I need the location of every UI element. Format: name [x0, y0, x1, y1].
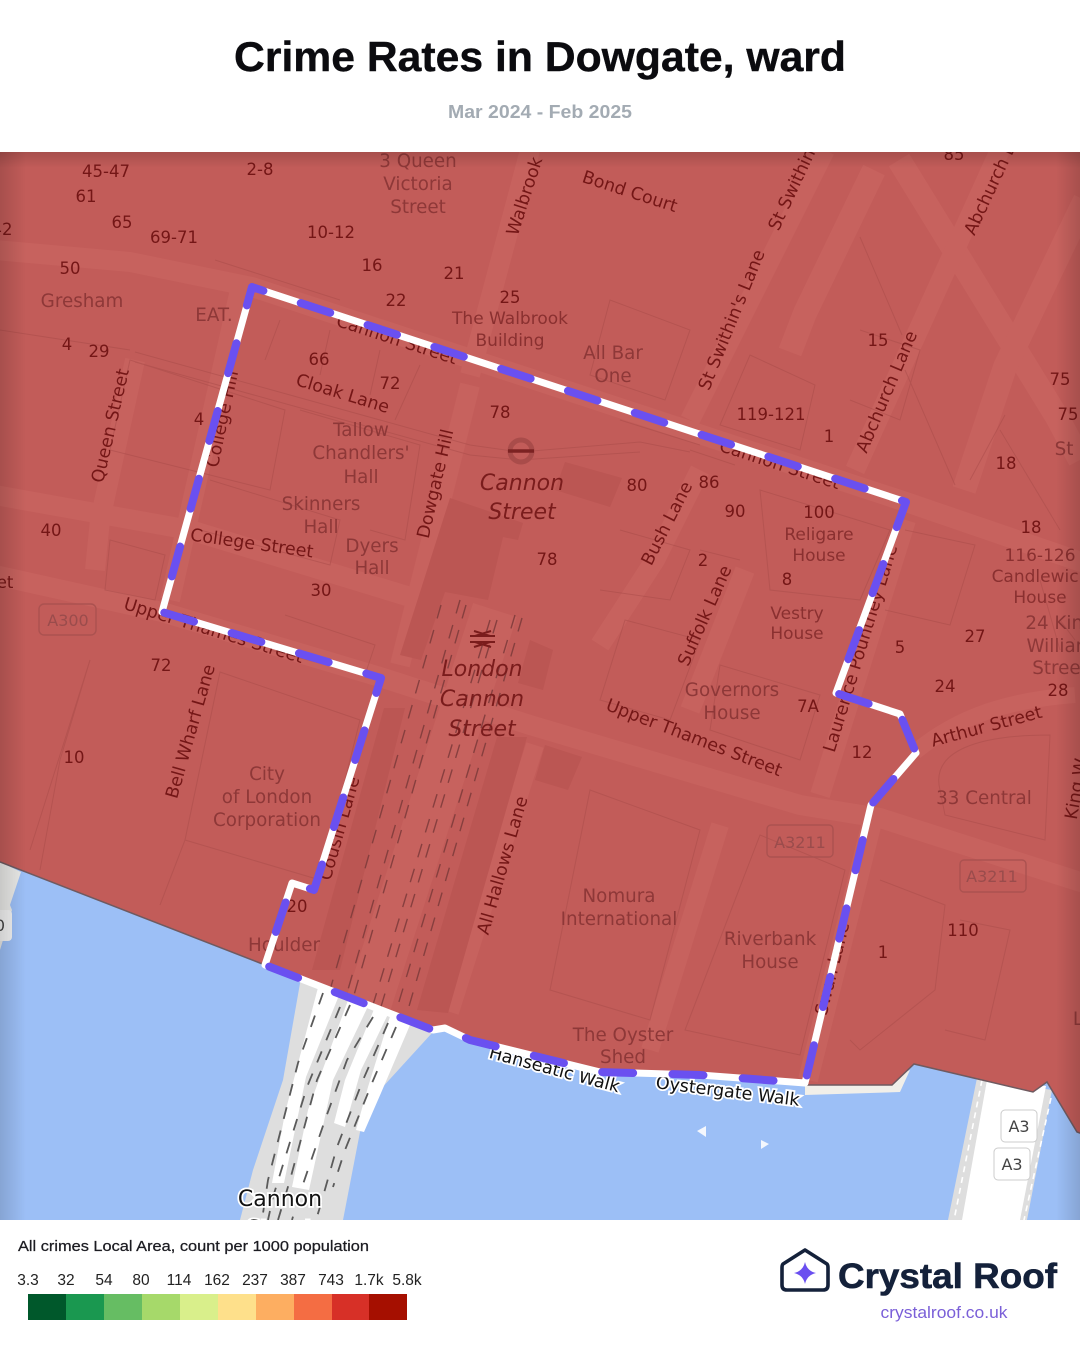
- house numbers: 25: [500, 288, 520, 307]
- house numbers: 8: [782, 570, 792, 589]
- road shields: [39, 604, 1026, 892]
- house numbers: 18: [996, 454, 1016, 473]
- station labels: Street: [448, 717, 517, 742]
- A3 shields: A3: [1008, 1117, 1030, 1136]
- edge vignette: [0, 152, 1080, 1220]
- riverside walk labels: [238, 1043, 801, 1242]
- station labels: London: [441, 657, 523, 682]
- icon: national rail symbol: [470, 631, 495, 647]
- road name labels: Abchurch L: [961, 141, 1020, 238]
- house numbers: 85: [944, 145, 964, 164]
- building names: Skinners: [282, 494, 360, 515]
- house numbers: 15: [868, 331, 888, 350]
- road name labels: St Swithin's Lane: [695, 247, 770, 393]
- road name labels: St Swithin: [765, 146, 820, 234]
- icon: underground roundel: [508, 440, 534, 462]
- building names: Tallow: [332, 420, 389, 441]
- river arrows: [697, 1126, 769, 1149]
- building names: Street: [390, 197, 446, 218]
- road shield labels: [47, 611, 1018, 886]
- wordmark: Crystal Roof: [838, 1257, 1057, 1296]
- road name labels: Queen Street: [88, 367, 134, 485]
- house numbers: 78: [536, 550, 558, 569]
- riverside walk labels: Street: [247, 1217, 314, 1242]
- building names: Gresham: [41, 291, 123, 312]
- house numbers: 61: [76, 187, 96, 206]
- station labels: Cannon: [440, 687, 524, 712]
- house numbers: 119-121: [737, 405, 805, 424]
- land: crime-rate choropleth fill: [0, 150, 1080, 1135]
- house numbers: 29: [88, 342, 110, 361]
- building names: St: [1055, 439, 1073, 460]
- road name labels: Cannon Street: [717, 436, 843, 494]
- road name labels: Bush Lane: [638, 479, 697, 569]
- house numbers: 7A: [797, 697, 820, 716]
- west bank fragment: [0, 862, 21, 950]
- building names: Riverbank: [724, 929, 817, 950]
- house numbers: 18: [1020, 518, 1042, 537]
- house numbers: 86: [698, 473, 720, 492]
- building names: Shed: [600, 1047, 646, 1068]
- house numbers: 12: [852, 743, 872, 762]
- road name labels: Arthur Street: [929, 703, 1045, 752]
- legend scale values: 387: [280, 1272, 306, 1289]
- logo: Crystal Roof: [782, 1250, 1057, 1322]
- A3 shields: A3: [1001, 1155, 1023, 1174]
- house numbers: 10-12: [307, 223, 355, 242]
- road name labels: All Hallows Lane: [474, 794, 533, 937]
- building outlines: [0, 237, 1075, 1055]
- legend scale values: 1.7k: [354, 1272, 384, 1289]
- building names: [41, 151, 1080, 1068]
- legend scale values: 5.8k: [392, 1272, 422, 1289]
- station labels: Street: [488, 500, 557, 525]
- house numbers: 22: [386, 291, 406, 310]
- house numbers: 45-47: [82, 162, 130, 181]
- house numbers: 75: [1050, 370, 1070, 389]
- house numbers: 21: [444, 264, 464, 283]
- building names: EAT.: [195, 305, 233, 326]
- building names: Dyers: [345, 536, 399, 557]
- house numbers: 24: [934, 677, 956, 696]
- legend scale values: 743: [318, 1272, 344, 1289]
- house numbers: 75: [1058, 405, 1078, 424]
- building names: House: [1013, 588, 1067, 608]
- house numbers: 90: [724, 502, 746, 521]
- legend scale values: 32: [57, 1272, 75, 1289]
- building names: The Oyster: [572, 1025, 674, 1046]
- building names: House: [703, 703, 761, 724]
- building names: All Bar: [583, 343, 643, 364]
- railway tracks into station: [330, 600, 522, 1020]
- building names: Religare: [784, 525, 854, 545]
- house numbers: 4: [62, 335, 72, 354]
- station labels: [440, 471, 564, 742]
- house numbers: 80: [626, 476, 648, 495]
- building names: Governors: [685, 680, 779, 701]
- road name labels: Upper Thames Street: [121, 594, 306, 668]
- river water: [0, 865, 1080, 1220]
- building names: 3 Queen: [379, 151, 457, 172]
- railway bridge: [240, 972, 432, 1220]
- house numbers: 72: [150, 656, 172, 675]
- legend scale values: 114: [167, 1272, 192, 1289]
- riverside walk labels: Cannon: [238, 1187, 322, 1212]
- building names: House: [741, 952, 799, 973]
- ward boundary: [162, 287, 916, 1083]
- building names: Hall: [354, 558, 390, 579]
- roads: [0, 150, 1080, 1080]
- riverside walk labels: Oystergate Walk: [655, 1073, 801, 1111]
- title: Crime Rates in Dowgate, ward: [234, 33, 846, 80]
- building names: Building: [476, 331, 544, 351]
- station labels: Cannon: [480, 471, 564, 496]
- building names: Hall: [303, 517, 339, 538]
- road name labels: College Hill: [203, 369, 243, 469]
- road name labels: Bond Court: [580, 168, 680, 217]
- A3 shields: [994, 1110, 1037, 1180]
- road name labels: Upper Thames Street: [603, 696, 785, 781]
- website url: crystalroof.co.uk: [880, 1304, 1008, 1322]
- road name labels: Laurence Pountney Lane: [820, 542, 902, 755]
- building names: of London: [222, 787, 312, 808]
- house numbers: 66: [308, 350, 330, 369]
- building names: Corporation: [213, 810, 321, 831]
- road name labels: Cousin Lane: [316, 774, 365, 883]
- legend title: All crimes Local Area, count per 1000 population: [18, 1239, 369, 1255]
- subtitle: date range: Mar 2024 - Feb 2025: [448, 101, 632, 122]
- road name labels: [88, 141, 1080, 1017]
- road name labels: Cannon Street: [334, 311, 460, 369]
- road name labels: Cloak Lane: [293, 371, 392, 418]
- icon: house with star: [782, 1250, 828, 1290]
- legend scale values: 162: [204, 1272, 230, 1289]
- riverside walk labels: Hanseatic Walk: [487, 1043, 623, 1097]
- road name labels: Suffolk Lane: [674, 563, 737, 669]
- legend scale values: 80: [132, 1272, 150, 1289]
- road shield labels: A300: [47, 611, 89, 630]
- house numbers: 50: [60, 259, 80, 278]
- building names: Victoria: [383, 174, 453, 195]
- legend colour ramp: [28, 1294, 407, 1320]
- house numbers: 72: [380, 374, 400, 393]
- building names: Houlder: [248, 935, 320, 956]
- building names: 116-126: [1004, 546, 1076, 566]
- legend scale values: 54: [95, 1272, 113, 1289]
- building names: 33 Central: [936, 788, 1032, 809]
- house numbers: 78: [490, 403, 510, 422]
- road name labels: Bell Wharf Lane: [163, 662, 220, 801]
- legend: [17, 1239, 422, 1320]
- road name labels: Swan Lane: [812, 920, 854, 1017]
- house numbers: 30: [310, 581, 332, 600]
- house numbers: 27: [964, 627, 986, 646]
- legend scale values: [17, 1272, 422, 1289]
- building names: Nomura: [583, 886, 655, 907]
- legend scale values: 237: [242, 1272, 268, 1289]
- house numbers: 5: [895, 638, 905, 657]
- building names: International: [561, 909, 677, 930]
- building names: City: [249, 764, 285, 785]
- house numbers: 16: [362, 256, 382, 275]
- partial shield at left edge: [0, 910, 12, 941]
- station and platform roofs: [400, 498, 516, 1012]
- house numbers: 20: [286, 897, 308, 916]
- house numbers: 40: [40, 521, 62, 540]
- house numbers: 69-71: [150, 228, 198, 247]
- building names: Chandlers': [312, 443, 410, 464]
- building names: Hall: [343, 467, 379, 488]
- road name labels: Dowgate Hill: [414, 427, 458, 540]
- house numbers: 2: [698, 551, 708, 570]
- house numbers: 4: [194, 410, 204, 429]
- A3 road bridge: [948, 1078, 1052, 1220]
- building names: One: [594, 366, 632, 387]
- south bank edge strip: [805, 1070, 910, 1095]
- house numbers: 28: [1048, 681, 1068, 700]
- road shield labels: A3211: [966, 867, 1018, 886]
- house numbers: 10: [64, 748, 84, 767]
- building names: The Walbrook: [451, 309, 568, 329]
- house numbers: 100: [803, 503, 835, 522]
- house numbers: 1: [878, 943, 888, 962]
- road name labels: College Street: [189, 526, 315, 563]
- legend scale values: 3.3: [17, 1272, 39, 1289]
- building names: House: [770, 624, 824, 644]
- road shield labels: A3211: [774, 833, 826, 852]
- road name labels: Walbrook: [503, 154, 548, 238]
- house numbers: 2-8: [247, 160, 273, 179]
- road name labels: Abchurch Lane: [853, 328, 922, 456]
- house numbers: 110: [947, 921, 979, 940]
- house numbers: [0, 145, 1078, 962]
- house numbers: 65: [112, 213, 132, 232]
- building names: House: [792, 546, 846, 566]
- house numbers: 1: [824, 427, 834, 446]
- building names: Vestry: [770, 604, 824, 624]
